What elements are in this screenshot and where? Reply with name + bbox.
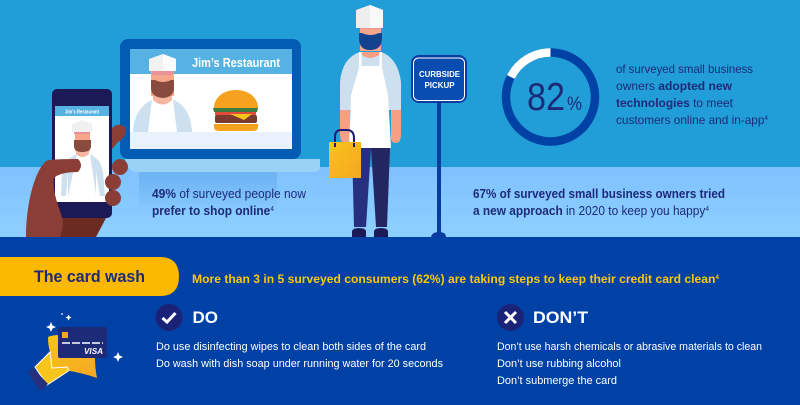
stat: adopted new technologies: customers online and in-app (616, 113, 767, 127)
masked chef holding bag (329, 5, 401, 237)
stat: adopted new technologies: 4 (764, 115, 768, 122)
stat: prefer to shop online: 49% of surveyed people now (152, 187, 307, 201)
donut chart 82% (506, 52, 595, 142)
upper background (0, 0, 800, 167)
stat: tried a new approach: 67% of surveyed small business owners tried (473, 187, 725, 201)
smartphone in hand (26, 89, 128, 237)
icon: cross (497, 304, 524, 331)
chef on laptop (133, 54, 192, 132)
restaurant name: Jim’s Restaurant (192, 56, 281, 70)
icon: hand holding visa card with cloth (28, 313, 123, 391)
phone restaurant name: Jim’s Restaurant (65, 110, 99, 116)
donut chart 82%: % (567, 94, 582, 115)
card wash summary: 4 (715, 274, 719, 281)
dont list: Don’t submerge the card (497, 375, 617, 387)
icon: hand holding visa card with cloth: VISA (84, 347, 103, 356)
curbside pickup sign: PICKUP (424, 81, 455, 90)
dont list: Don’t use rubbing alcohol (497, 358, 621, 370)
curbside pickup sign: CURBSIDE (419, 70, 461, 79)
icon: check (156, 304, 182, 331)
dont list (497, 341, 762, 387)
card wash heading pill: The card wash (34, 267, 145, 286)
lower band (0, 237, 800, 405)
do list: Do use disinfecting wipes to clean both sides of the card (156, 341, 426, 353)
stat: adopted new technologies: of surveyed small business (616, 62, 753, 76)
dont heading: DON’T (533, 308, 589, 327)
dont list: Don’t use harsh chemicals or abrasive materials to clean (497, 341, 762, 353)
card wash heading pill (0, 257, 179, 296)
stat: tried a new approach (473, 187, 725, 218)
stat: adopted new technologies: technologies to meet (616, 96, 734, 110)
stat: prefer to shop online: 4 (270, 206, 274, 213)
laptop (120, 39, 320, 210)
card wash summary: More than 3 in 5 surveyed consumers (62%) are taking steps to keep their credit card clean (192, 272, 723, 286)
hand (26, 125, 128, 237)
burger (213, 90, 258, 131)
donut chart 82%: 82 (527, 76, 565, 119)
do list: Do wash with dish soap under running water for 20 seconds (156, 358, 443, 370)
stat: adopted new technologies (616, 62, 768, 127)
do list (156, 341, 443, 370)
curbside pickup sign (411, 55, 467, 237)
stat: prefer to shop online (152, 187, 307, 218)
floor background (0, 167, 800, 237)
do heading: DO (192, 308, 218, 327)
stat: prefer to shop online: prefer to shop online (152, 204, 277, 218)
chef on phone (61, 120, 105, 202)
stat: tried a new approach: 4 (705, 206, 709, 213)
stat: tried a new approach: a new approach in 2020 to keep you happy (473, 204, 714, 218)
stat: adopted new technologies: owners adopted new (616, 79, 733, 93)
